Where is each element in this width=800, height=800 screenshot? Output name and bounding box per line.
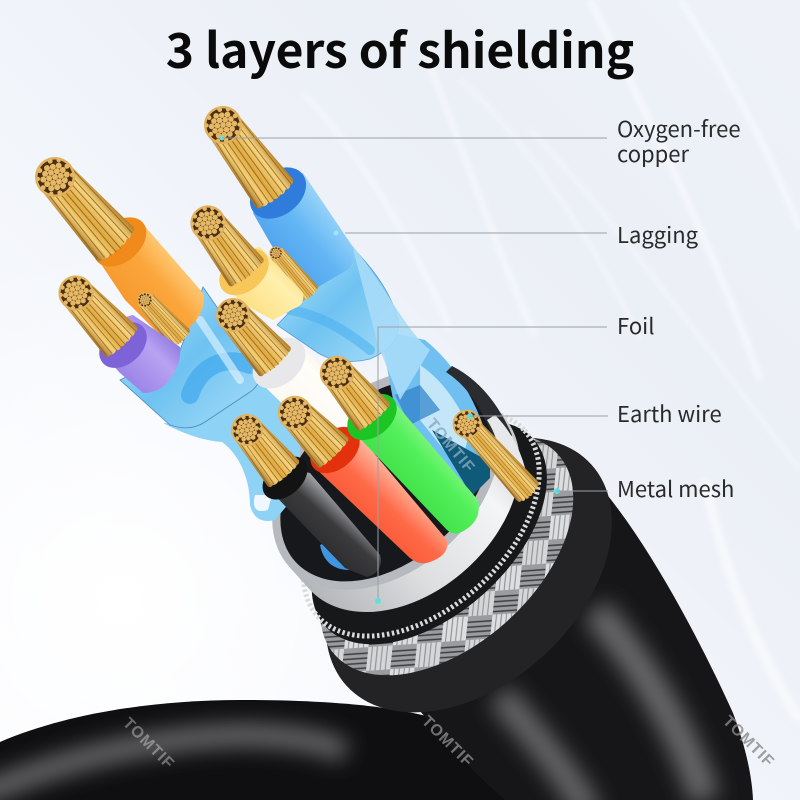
white flow highlight bbox=[254, 495, 272, 511]
callout: oxygen-free copper: Oxygen-free bbox=[617, 112, 741, 144]
cable head frame bbox=[202, 304, 665, 767]
callout: earth wire bbox=[467, 397, 722, 429]
callout: metal mesh bbox=[554, 472, 734, 504]
main cable jacket bbox=[420, 496, 753, 800]
blue patch in opening bbox=[320, 542, 370, 570]
earth wire bbox=[447, 404, 543, 506]
callout: lagging bbox=[334, 218, 699, 250]
callout: foil bbox=[375, 309, 654, 604]
foil: lagging tail bbox=[352, 245, 430, 400]
watermarks: TOMTIF bbox=[418, 713, 476, 771]
callout: foil: Foil bbox=[617, 309, 654, 341]
callout: earth wire: Earth wire bbox=[617, 397, 722, 429]
foil: top bbox=[277, 245, 398, 361]
bottom coiled cable bbox=[0, 700, 505, 800]
wire: red bbox=[268, 386, 447, 563]
silver foil band bbox=[229, 326, 563, 656]
blue lagging interior bbox=[380, 330, 490, 490]
cable opening bbox=[241, 338, 531, 622]
wire: green bbox=[310, 346, 479, 534]
watermarks: TOMTIF bbox=[119, 715, 177, 773]
callout: oxygen-free copper: copper bbox=[617, 137, 689, 169]
black collar bbox=[273, 383, 665, 767]
drain wire: orange side bbox=[131, 286, 192, 350]
metal mesh braid bbox=[251, 361, 618, 722]
callout: metal mesh: Metal mesh bbox=[617, 472, 734, 504]
wire: purple bbox=[48, 265, 180, 393]
watermarks: TOMTIF bbox=[719, 713, 777, 771]
title: 3 layers of shielding bbox=[166, 12, 634, 82]
wire: white bbox=[206, 288, 390, 472]
foil: lower flow bbox=[163, 375, 300, 521]
wire: blue bbox=[193, 96, 354, 290]
wire: black bbox=[221, 405, 381, 577]
foil: left bbox=[120, 287, 262, 428]
drain wire: yellow side bbox=[263, 241, 320, 303]
callout: oxygen-free copper bbox=[220, 112, 741, 169]
wire: yellow bbox=[180, 196, 303, 320]
callout: lagging: Lagging bbox=[617, 218, 699, 250]
watermarks: TOMTIF bbox=[423, 416, 478, 477]
dark rim bbox=[446, 366, 512, 460]
wire: orange bbox=[23, 146, 204, 345]
foil brush highlights bbox=[190, 310, 370, 395]
watermarks bbox=[119, 416, 777, 773]
